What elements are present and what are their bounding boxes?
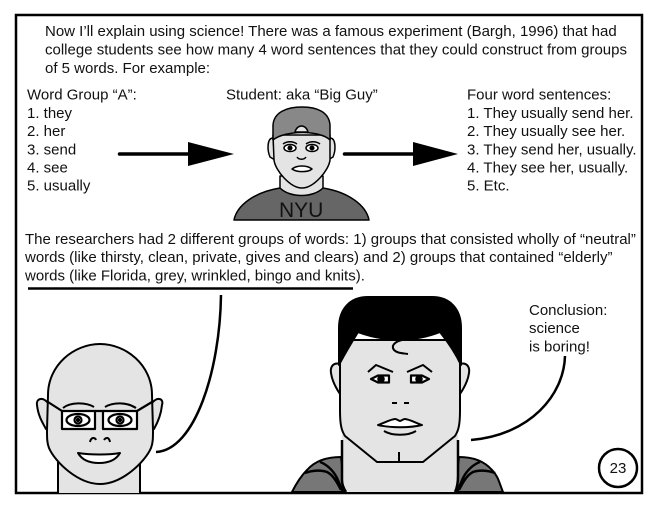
intro text block: of 5 words. For example: [45,60,210,77]
head [47,344,153,484]
four word sentences list [467,86,637,194]
shirt label: NYU [279,199,323,222]
intro text block [45,23,627,77]
researchers text block: words (like thirsty, clean, private, gives and clears) and 2) groups that contained “elderly” [24,249,613,266]
chin cleft [398,452,400,462]
mouth [292,166,312,172]
word group list: 5. usually [27,178,91,194]
face [273,135,330,188]
shirt [234,188,369,220]
four word sentences list: Four word sentences: [467,86,611,104]
researchers text block [24,231,636,284]
page number [599,449,637,487]
neck [342,435,458,492]
arrow: word group to student [120,142,234,166]
four word sentences list: 2. They usually see her. [467,123,625,140]
arrow: student to sentences [344,142,458,166]
intro text block: college students see how many 4 word sentences that they could construct from groups [45,42,627,58]
four word sentences list: 3. They send her, usually. [467,142,637,158]
word group list: 1. they [27,105,73,122]
smile [78,453,120,463]
word group list: 4. see [27,160,68,176]
neck [58,462,140,493]
glasses [48,402,152,429]
ears [331,363,469,394]
conclusion text: science [529,320,580,337]
speech bubble rule [28,287,353,290]
mouth [378,419,422,427]
forelock [393,340,408,354]
four word sentences list: 5. Etc. [467,178,510,194]
eyebrows and nose [63,403,136,442]
ears [37,399,162,430]
researchers text block: words (like Florida, grey, wrinkled, bingo and knits). [24,268,365,284]
page number: 23 [610,460,626,477]
four word sentences list: 4. They see her, usually. [467,160,628,176]
bald man with glasses [37,344,162,493]
ears [268,138,335,160]
researchers text block: The researchers had 2 different groups of words: 1) groups that consisted wholly of “neutral” [25,231,636,248]
word group list [27,86,137,194]
eyes and brows [283,142,320,159]
intro text block: Now I’ll explain using science! There was a famous experiment (Bargh, 1996) that had [45,23,617,40]
word group list: 3. send [27,142,76,158]
word group list: Word Group “A”: [27,86,137,104]
eyes and brows [368,365,432,372]
student figure [234,107,369,222]
conclusion text: is boring! [529,338,590,356]
four word sentences list: 1. They usually send her. [467,105,634,122]
muscular man [292,297,503,492]
student label: Student: aka “Big Guy” [226,86,378,104]
nose [392,402,409,404]
conclusion text [529,302,607,356]
shoulders [292,457,503,492]
hair [339,297,461,365]
speech tail: muscular man [471,356,565,440]
speech tail: bald man [156,295,221,452]
cap [273,107,330,140]
neck [280,176,323,196]
conclusion text: Conclusion: [529,302,607,319]
word group list: 2. her [27,123,65,140]
face [340,340,460,462]
